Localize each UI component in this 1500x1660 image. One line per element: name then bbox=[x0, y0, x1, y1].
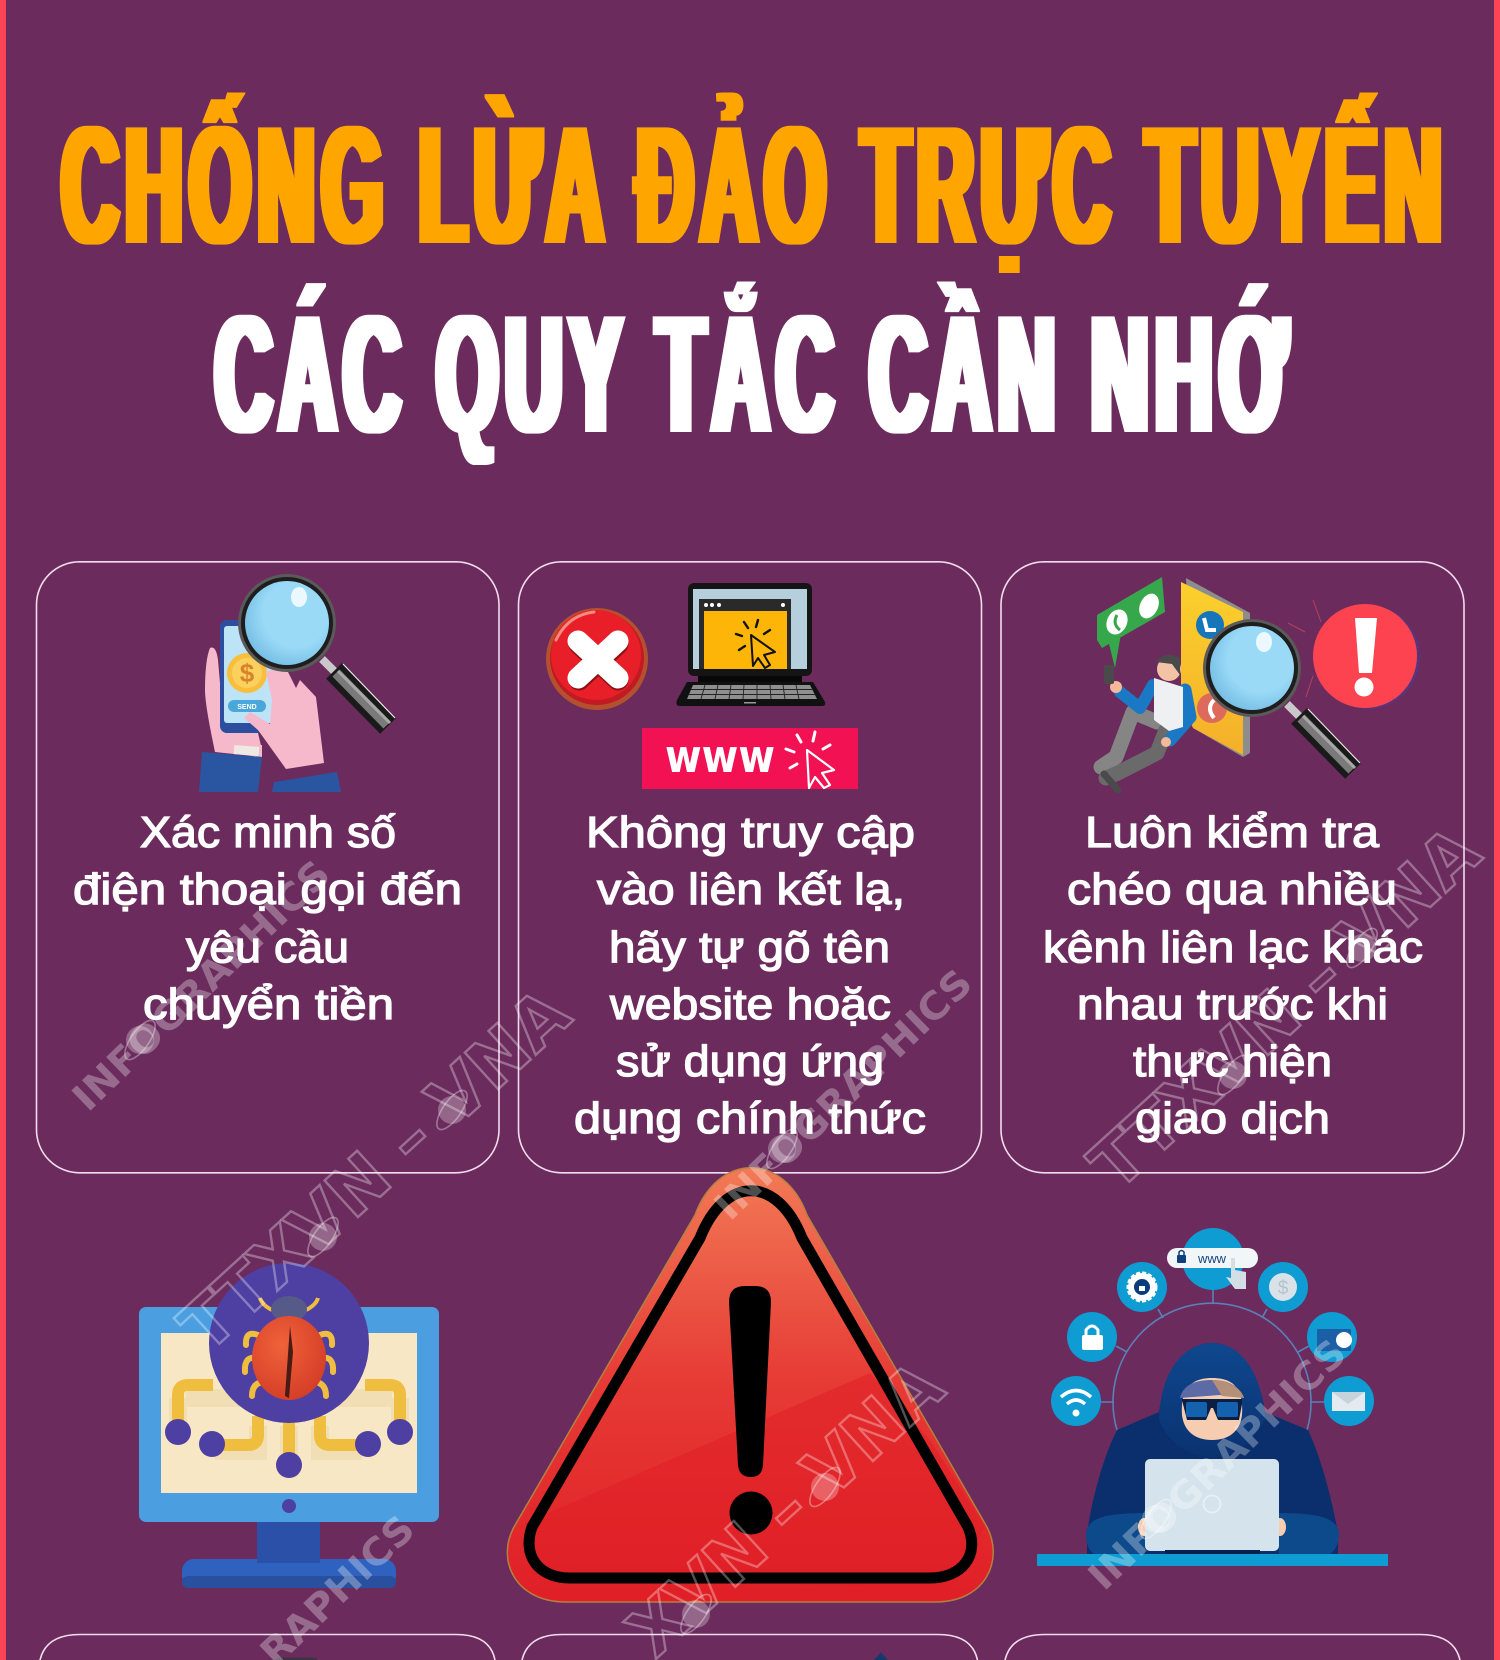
panel border bbox=[40, 1634, 495, 1660]
icon: www link banner bbox=[642, 728, 858, 789]
icon: laptop with cursor bbox=[676, 583, 825, 706]
panel text: kênh liên lạc khác bbox=[1043, 923, 1423, 972]
url bar: www bbox=[1197, 1251, 1227, 1266]
panel: lower left, cropped bbox=[40, 1634, 495, 1660]
panel text: dụng chính thức bbox=[574, 1094, 926, 1143]
icon: cropped top bbox=[874, 1652, 888, 1660]
panel: lower centre, cropped bbox=[522, 1634, 978, 1660]
panel text: sử dụng ứng bbox=[616, 1037, 884, 1086]
panel text: nhau trước khi bbox=[1077, 980, 1388, 1029]
panel: cross-check channels bbox=[1001, 562, 1464, 1173]
panel border bbox=[522, 1634, 978, 1660]
title bbox=[62, 91, 1448, 468]
panel text: vào liên kết lạ, bbox=[597, 865, 905, 914]
panel text: chéo qua nhiều bbox=[1067, 865, 1397, 914]
panel border bbox=[36, 562, 499, 1173]
panel border bbox=[518, 562, 982, 1173]
url bar bbox=[1167, 1248, 1258, 1289]
icon: red cross button bbox=[546, 608, 648, 710]
icon: monitor with bug bbox=[139, 1263, 439, 1588]
watermark: INFOGRAPHICS centre: INFOGRAPHICS bbox=[706, 961, 981, 1228]
panel: lower right, cropped bbox=[1005, 1634, 1460, 1660]
panel text: yêu cầu bbox=[186, 923, 349, 972]
panel text: thực hiện bbox=[1133, 1037, 1332, 1086]
watermark: INFOGRAPHICS right: INFOGRAPHICS bbox=[1080, 1331, 1355, 1598]
icon: phone under magnifier bbox=[199, 574, 395, 792]
watermark: TTXVN VNA left: TTXVN – VNA bbox=[165, 974, 586, 1368]
panel text: giao dịch bbox=[1135, 1094, 1330, 1143]
icon: hacker with laptop bbox=[1037, 1228, 1388, 1566]
panel text: Luôn kiểm tra bbox=[1085, 808, 1380, 857]
panel text bbox=[574, 808, 926, 1143]
panel: verify caller number bbox=[36, 562, 499, 1173]
panel: do not open strange links bbox=[518, 562, 982, 1173]
panel text: website hoặc bbox=[609, 980, 891, 1029]
icon: person checking phone with magnifier bbox=[1097, 577, 1360, 790]
panel border bbox=[1001, 562, 1464, 1173]
icon: phone under magnifier: SEND bbox=[237, 704, 257, 711]
panel text bbox=[73, 808, 462, 1029]
icon: www link banner: www bbox=[665, 730, 775, 783]
panel text: Không truy cập bbox=[586, 808, 915, 857]
watermark: INFOGRAPHICS left: INFOGRAPHICS bbox=[64, 852, 339, 1119]
panel text: điện thoại gọi đến bbox=[73, 865, 462, 914]
icon: red alert circle bbox=[1313, 604, 1420, 709]
panel text bbox=[1043, 808, 1423, 1143]
panel text: hãy tự gõ tên bbox=[609, 923, 890, 972]
panel text: chuyển tiền bbox=[143, 980, 394, 1029]
watermark: TTXVN VNA right: TTXVN – VNA bbox=[1075, 812, 1496, 1206]
icon: phone under magnifier: $ bbox=[240, 658, 255, 688]
desk bbox=[1037, 1554, 1388, 1566]
panel text: Xác minh số bbox=[140, 808, 396, 857]
icon: warning triangle bbox=[507, 1168, 993, 1602]
icon: hacker with laptop: $ bbox=[1278, 1278, 1289, 1299]
icon: cropped top bbox=[275, 1658, 318, 1660]
